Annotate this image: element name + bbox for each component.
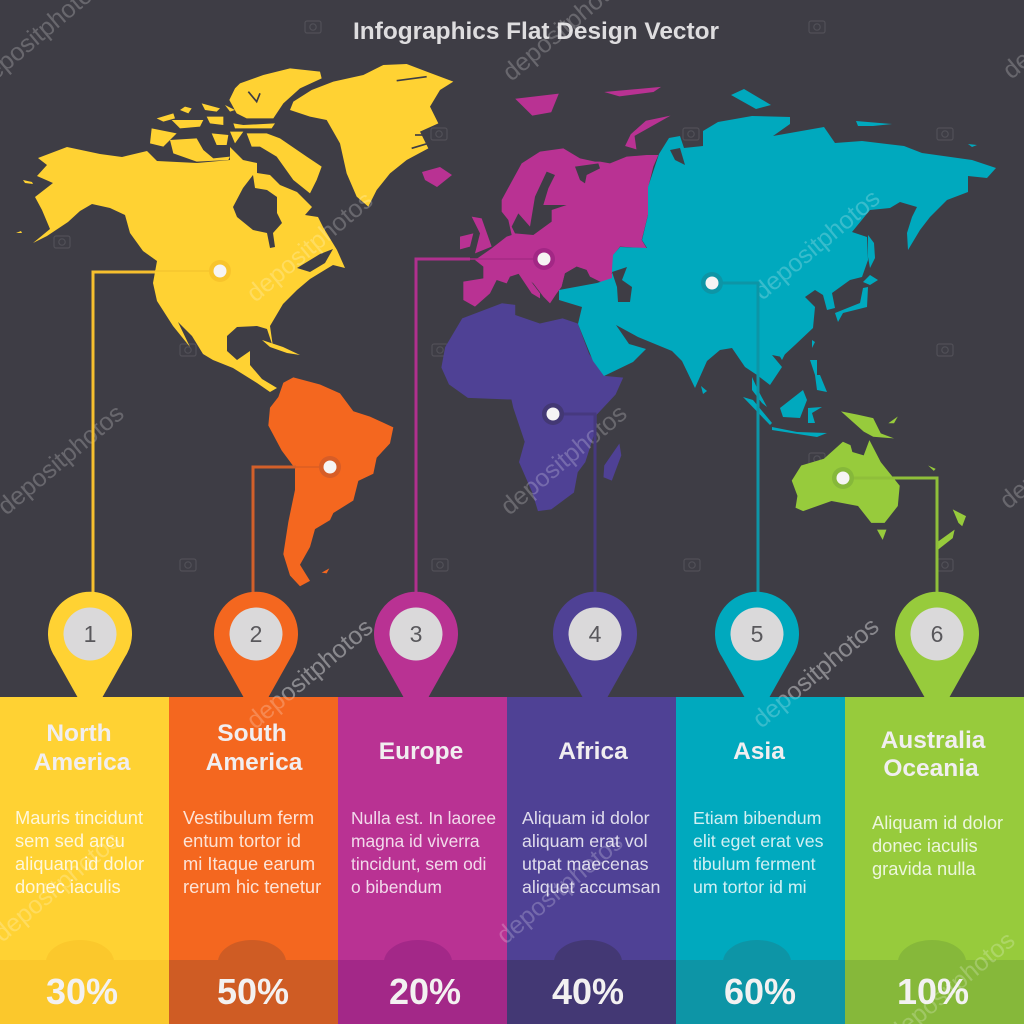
heading: Oceania — [883, 755, 979, 782]
watermarks over panels: depositphotos — [241, 613, 378, 735]
panel: South America — [169, 592, 338, 1024]
heading: America — [206, 749, 303, 776]
description: gravida nulla — [872, 858, 976, 879]
pin 2: 2 — [250, 621, 262, 647]
percent band — [338, 940, 507, 1024]
description: Aliquam id dolor — [522, 808, 650, 828]
leader line: North America — [93, 271, 220, 595]
heading: Africa — [558, 738, 628, 765]
leader line: Australia — [843, 478, 937, 595]
map marker: Europe — [533, 248, 555, 270]
description: donec iaculis — [872, 835, 978, 856]
map: South America — [268, 377, 393, 586]
world map — [16, 64, 996, 586]
map: North America — [16, 64, 453, 392]
heading: Australia — [881, 727, 986, 754]
percent: 30% — [46, 971, 118, 1012]
arctic islands and Greenland — [150, 64, 453, 207]
panel: North America — [0, 592, 169, 1024]
description: magna id viverra — [351, 831, 480, 851]
pin 3: 3 — [410, 621, 422, 647]
pin 6 — [895, 592, 979, 698]
watermarks — [0, 0, 1024, 735]
leader line: Asia — [712, 283, 758, 595]
map marker: Africa — [542, 403, 564, 425]
heading: America — [34, 749, 131, 776]
percent: 60% — [724, 971, 796, 1012]
percent band — [0, 940, 169, 1024]
heading: South — [217, 720, 287, 747]
map marker: North America — [209, 260, 231, 282]
description: donec iaculis — [15, 876, 121, 897]
panel: Australia Oceania — [845, 592, 1024, 1024]
description: tincidunt, sem odi — [351, 854, 486, 874]
panel: Europe — [338, 592, 507, 1024]
description: mi Itaque earum — [183, 853, 315, 874]
watermarks over panels — [0, 612, 1020, 1024]
map: Australia and Oceania — [792, 411, 966, 550]
description: rerum hic tenetur — [183, 876, 321, 897]
map: Africa — [441, 303, 623, 511]
watermarks over panels: depositphotos — [747, 612, 884, 734]
description: Aliquam id dolor — [872, 812, 1003, 833]
pin 4: 4 — [589, 621, 602, 647]
heading: North — [46, 720, 112, 747]
pin 1 — [48, 592, 132, 698]
description: Nulla est. In laoree — [351, 808, 496, 828]
pin 2 — [214, 592, 298, 698]
title: Infographics Flat Design Vector — [353, 18, 719, 45]
map marker: South America — [319, 456, 341, 478]
description: sem sed arcu — [15, 830, 125, 851]
panel: Africa — [507, 592, 676, 1024]
watermarks: depositphotos — [241, 613, 378, 735]
description: Etiam bibendum — [693, 808, 822, 828]
percent: 10% — [897, 971, 969, 1012]
heading: Europe — [379, 738, 463, 765]
map: Europe — [422, 87, 671, 307]
description: um tortor id mi — [693, 877, 807, 897]
percent band — [676, 940, 845, 1024]
description: aliquam erat vol — [522, 831, 648, 851]
map marker: Australia — [832, 467, 854, 489]
watermarks: depositphotos — [495, 399, 632, 521]
pin 4 — [553, 592, 637, 698]
description: o bibendum — [351, 877, 442, 897]
percent band — [169, 940, 338, 1024]
description: utpat maecenas — [522, 854, 649, 874]
heading: Asia — [733, 738, 785, 765]
pin 6: 6 — [931, 621, 943, 647]
pin 5 — [715, 592, 799, 698]
percent: 50% — [217, 971, 289, 1012]
watermarks: depositphotos — [747, 612, 884, 734]
map: Asia — [559, 89, 996, 437]
watermarks: depositphotos — [241, 186, 378, 308]
description: aliquet accumsan — [522, 877, 660, 897]
pin 1: 1 — [84, 621, 96, 647]
pin 5: 5 — [751, 621, 763, 647]
panel: Asia — [676, 592, 845, 1024]
watermarks: depositphotos — [748, 184, 885, 306]
leader line: Africa — [553, 414, 595, 592]
watermark camera marks — [54, 21, 953, 571]
description: entum tortor id — [183, 830, 301, 851]
watermarks over panels: depositphotos — [491, 828, 628, 950]
map marker: Asia — [701, 272, 723, 294]
description: aliquam id dolor — [15, 853, 144, 874]
percent: 40% — [552, 971, 624, 1012]
percent band — [845, 940, 1024, 1024]
leader line: Europe — [416, 259, 544, 595]
description: tibulum ferment — [693, 854, 816, 874]
description: Vestibulum ferm — [183, 807, 314, 828]
percent: 20% — [389, 971, 461, 1012]
leader line: South America — [253, 467, 330, 595]
percent band — [507, 940, 676, 1024]
description: elit eget erat ves — [693, 831, 824, 851]
pin 3 — [374, 592, 458, 698]
description: Mauris tincidunt — [15, 807, 143, 828]
